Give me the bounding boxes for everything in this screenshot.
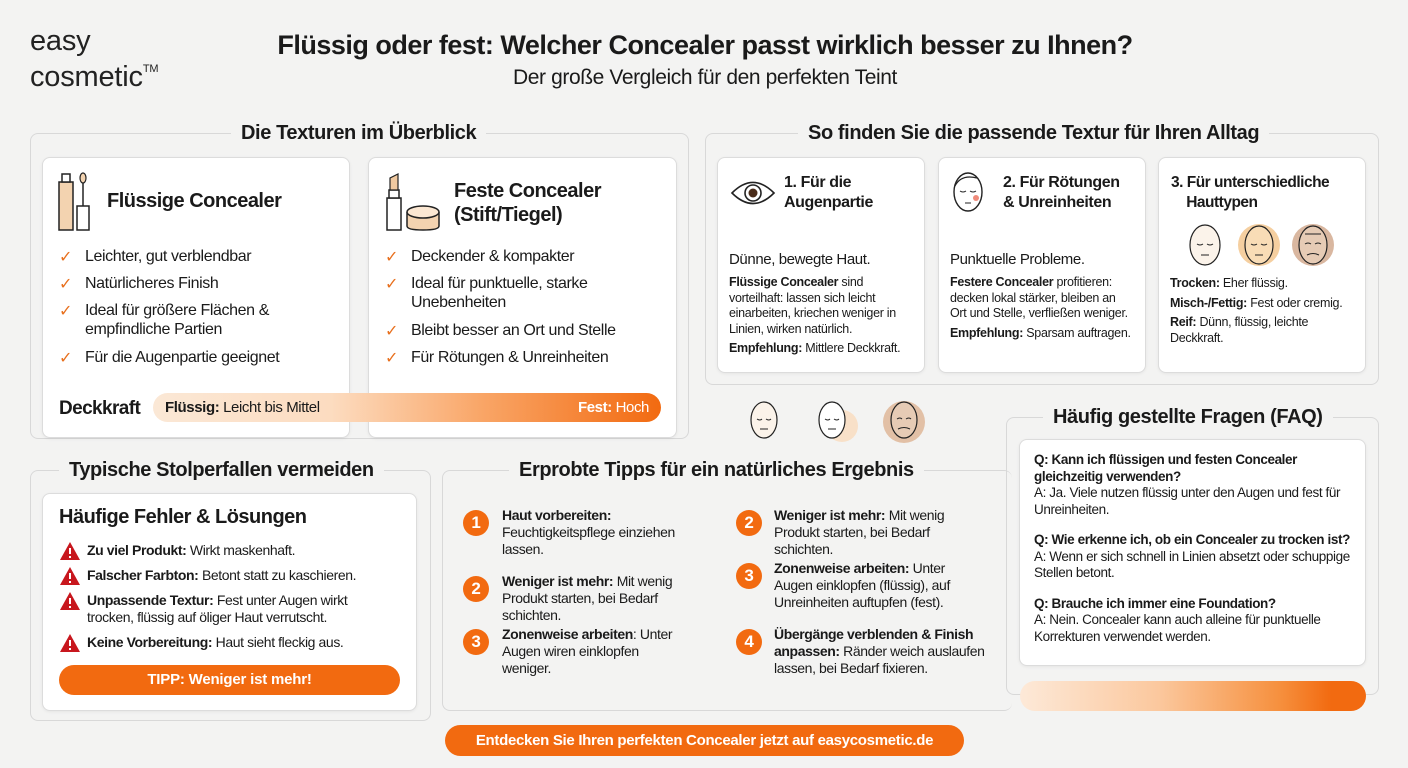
card: Fehler: Falscher Farbton: Betont statt zu kaschieren. [87, 567, 356, 583]
button: TIPP: TIPP: Weniger ist mehr! [147, 671, 312, 688]
card: flüssig: Für die Augenpartie geeignet [85, 349, 279, 366]
heading: Hauttypen [1186, 194, 1258, 211]
heading: 2. Für Rötungen [1003, 174, 1120, 191]
bar: FAQ gradient [1020, 681, 1366, 711]
panel: Tipps: 2 [471, 579, 481, 598]
panel: Tipps: 2 [744, 513, 754, 532]
icon: face with redness [953, 172, 983, 212]
card: fest [368, 157, 677, 438]
icon: liquid concealer [58, 172, 90, 231]
text: Festere Concealer profitieren: decken lokal stärker, bleiben an Ort und Stelle, verfließen weniger. [950, 275, 1128, 320]
text [1170, 276, 1342, 344]
card: fest: Deckender & kompakter [411, 248, 574, 265]
bar: Deckkraft gradient: Fest: Hoch [578, 399, 649, 416]
card: fest: Für Rötungen & Unreinheiten [411, 349, 608, 366]
card: flüssig: empfindliche Partien [85, 321, 222, 338]
text [950, 251, 1131, 340]
heading: Flüssige Concealer: Flüssige Concealer [107, 190, 281, 212]
heading [1171, 174, 1330, 211]
card: flüssig: Natürlicheres Finish [85, 275, 218, 292]
card: FAQ list: Q: Brauche ich immer eine Foundation? [1034, 596, 1276, 610]
panel: FAQ [1006, 417, 1379, 695]
panel: Tipps: 4 [744, 632, 754, 651]
text: Reif: Dünn, flüssig, leichte Deckkraft. [1170, 315, 1308, 344]
card: fest: Ideal für punktuelle, starke [411, 275, 587, 292]
text: Empfehlung: Sparsam auftragen. [950, 326, 1131, 340]
card: Fehler: trocken, flüssig auf öliger Haut verrutscht. [87, 609, 327, 625]
panel: Tipps: 3 [744, 566, 754, 585]
bar: Deckkraft gradient [153, 393, 661, 422]
card: Augenpartie [717, 157, 925, 373]
list: Fehler [60, 542, 356, 652]
panel: Tipps: Übergänge verblenden & Finish anpassen: Ränder weich auslaufen lassen, bei Bedarf fixieren. [774, 626, 985, 676]
button: TIPP [59, 665, 400, 695]
panel: Stolperfallen [30, 470, 431, 721]
text: Misch-/Fettig: Fest oder cremig. [1170, 296, 1342, 310]
heading: Tipps: Erprobte Tipps für ein natürliches Ergebnis [519, 459, 914, 481]
panel: Tipps: Zonenweise arbeiten: Unter Augen wiren einklopfen weniger. [502, 626, 672, 676]
card: Fehler [42, 493, 417, 711]
heading [784, 174, 873, 211]
list [61, 248, 280, 366]
heading: Augenpartie [784, 194, 873, 211]
heading: Feste Concealer [454, 180, 602, 226]
heading: Feste Concealer: Feste Concealer [454, 180, 601, 202]
card: flüssig: Leichter, gut verblendbar [85, 248, 251, 265]
panel: Tipps: Feuchtigkeitspflege einziehen lassen. [502, 524, 675, 557]
panel: Tipps: Haut vorbereiten: [502, 507, 611, 523]
panel: Tipps: Zonenweise arbeiten: Unter Augen einklopfen (flüssig), auf Unreinheiten auftupfen (fest). [774, 560, 950, 610]
list [387, 248, 616, 366]
panel: Tipps: Weniger ist mehr: Mit wenig Produkt starten, bei Bedarf schichten. [502, 573, 672, 623]
logo [30, 25, 158, 93]
panel: Tipps [442, 470, 1012, 711]
card: fest: Unebenheiten [411, 294, 506, 311]
panel: Texturen [30, 133, 689, 439]
text: Punktuelle Probleme. [950, 251, 1085, 268]
label: Deckkraft: Deckkraft [59, 398, 140, 419]
card: flüssig [42, 157, 350, 438]
text: Empfehlung: Mittlere Deckkraft. [729, 341, 900, 355]
icon: faces row [750, 401, 925, 443]
heading: Stolperfallen: Typische Stolperfallen vermeiden [69, 459, 374, 481]
panel: Tipps: Weniger ist mehr: Mit wenig Produkt starten, bei Bedarf schichten. [774, 507, 944, 557]
text [729, 251, 900, 355]
card: fest: Bleibt besser an Ort und Stelle [411, 322, 616, 339]
tips column left [463, 507, 675, 676]
text: Trocken: Eher flüssig. [1170, 276, 1288, 290]
card: flüssig: Ideal für größere Flächen & [85, 302, 269, 319]
heading: Alltag: So finden Sie die passende Textur für Ihren Alltag [808, 122, 1259, 144]
icon: stick and jar [386, 173, 440, 231]
card: FAQ list: A: Nein. Concealer kann auch alleine für punktuelle Korrekturen verwendet werden. [1034, 612, 1321, 644]
heading: Fehler & Lösungen: Häufige Fehler & Lösungen [59, 506, 307, 528]
text: Dünne, bewegte Haut. [729, 251, 870, 268]
heading: Texturen: Die Texturen im Überblick [241, 122, 476, 144]
panel: Tipps: 3 [471, 632, 481, 651]
logo: easy [30, 25, 90, 57]
panel: Alltag [705, 133, 1379, 385]
title: Flüssig oder fest: Welcher Concealer passt wirklich besser zu Ihnen? [277, 30, 1133, 60]
card: FAQ list: A: Wenn er sich schnell in Linien absetzt oder schuppige Stellen betont. [1034, 548, 1350, 580]
card: FAQ list: A: Ja. Viele nutzen flüssig unter den Augen und fest für Unreinheiten. [1034, 485, 1340, 516]
button: CTA [445, 725, 964, 756]
heading: & Unreinheiten [1003, 194, 1111, 211]
logo: cosmeticTM [30, 61, 158, 93]
card: Fehler: Zu viel Produkt: Wirkt maskenhaft. [87, 542, 295, 558]
tips column right [736, 507, 985, 676]
bar: Deckkraft gradient: Flüssig: Leicht bis Mittel [165, 399, 320, 416]
heading: 1. Für die [784, 174, 851, 191]
card: FAQ list: Q: Kann ich flüssigen und festen Concealer gleichzeitig verwenden? [1034, 452, 1297, 484]
icon: eye [730, 182, 775, 204]
card: Hauttypen [1158, 157, 1366, 373]
icon: three faces [1189, 224, 1334, 266]
heading: FAQ: Häufig gestellte Fragen (FAQ) [1053, 406, 1323, 428]
card: FAQ list [1019, 439, 1366, 666]
text: Flüssige Concealer sind vorteilhaft: lassen sich leicht einarbeiten, kriechen weniger in Linien, wirken natürlich. [729, 275, 896, 336]
card: Fehler: Unpassende Textur: Fest unter Augen wirkt [87, 592, 347, 608]
card: Fehler: Keine Vorbereitung: Haut sieht fleckig aus. [87, 634, 343, 650]
button: CTA: Entdecken Sie Ihren perfekten Concealer jetzt auf easycosmetic.de [476, 732, 933, 749]
card: FAQ list: Q: Wie erkenne ich, ob ein Concealer zu trocken ist? [1034, 532, 1350, 547]
heading [1003, 174, 1120, 211]
panel: Tipps: 1 [471, 513, 481, 532]
heading: 3. Für unterschiedliche [1171, 174, 1329, 191]
subtitle: Der große Vergleich für den perfekten Teint [513, 66, 897, 89]
card: Rötungen [938, 157, 1146, 373]
heading: Feste Concealer: (Stift/Tiegel) [454, 204, 562, 226]
